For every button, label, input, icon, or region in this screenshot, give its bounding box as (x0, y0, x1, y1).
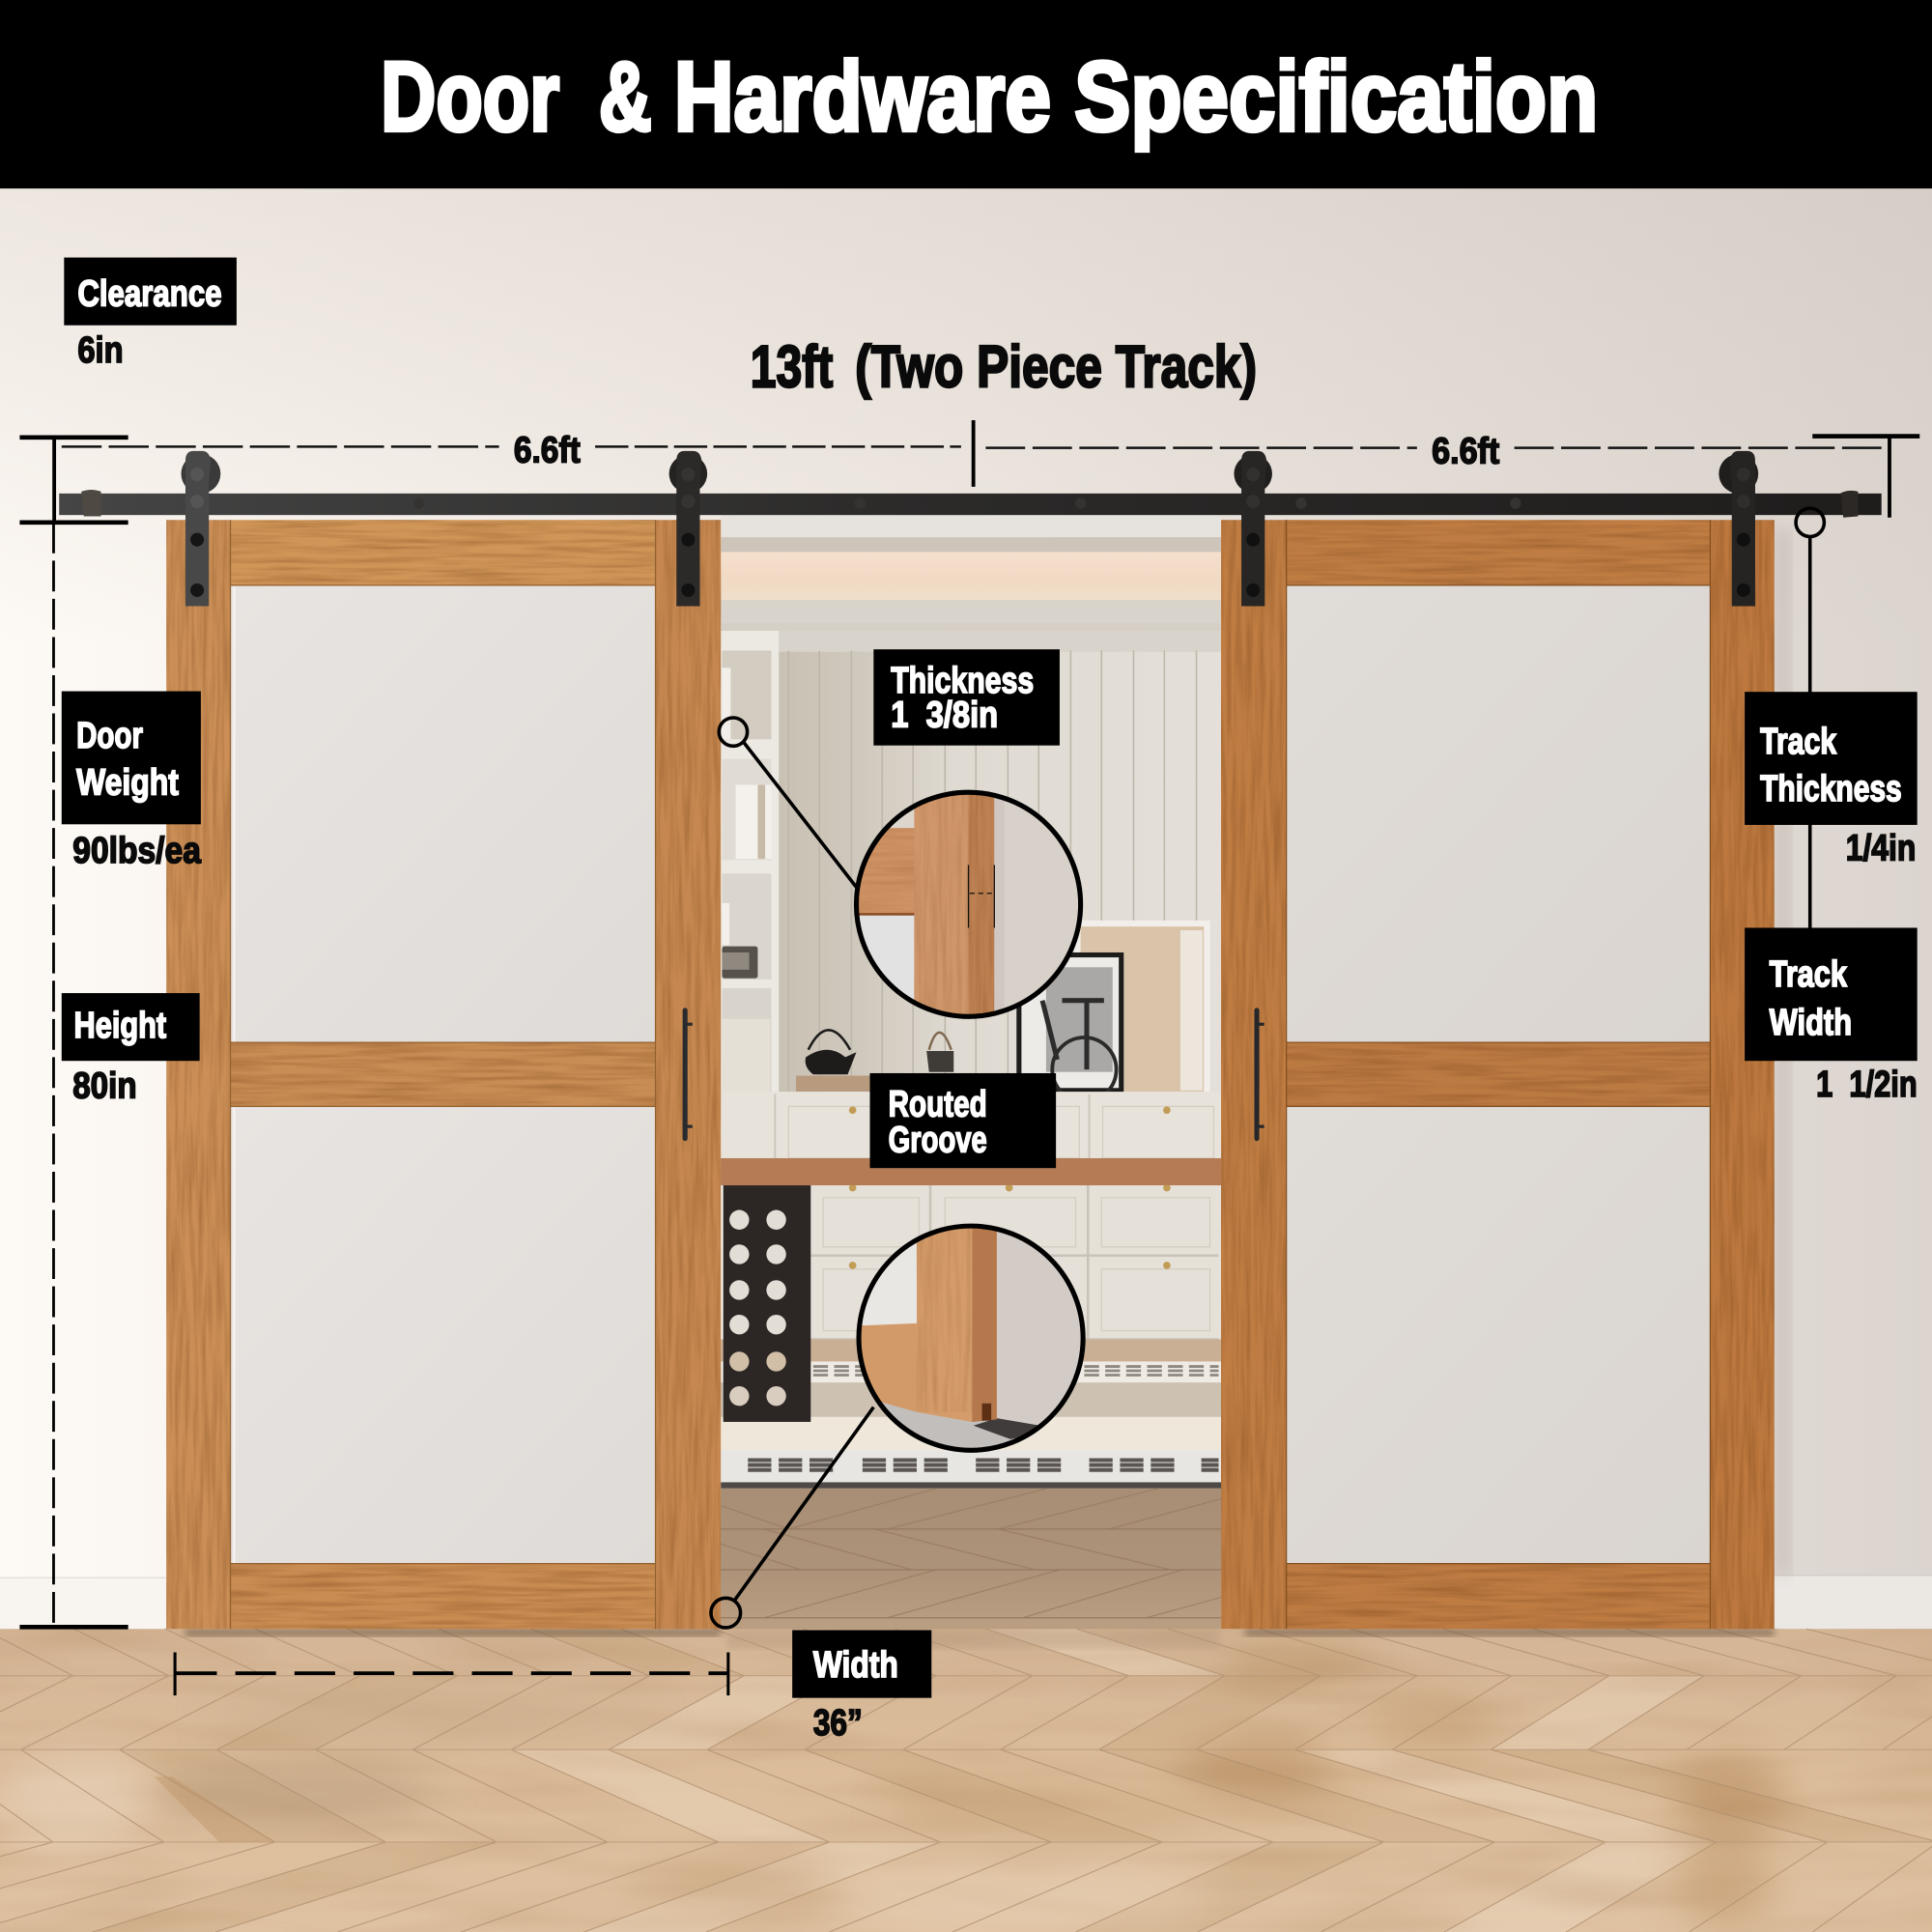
track length heading: 13ft (751, 334, 833, 400)
magnifier: door edge (850, 788, 1096, 1025)
leaning art: bicycle print (1016, 952, 1123, 1101)
counter top (721, 1158, 1221, 1185)
leaning art: canvas (1074, 921, 1210, 1093)
interior room seen through the opening (690, 515, 1233, 1630)
clearance label (64, 258, 237, 371)
floor plank lines (0, 1629, 1932, 1932)
routed groove label (870, 1073, 1056, 1168)
floor band and rug (721, 1339, 1221, 1489)
clearance label: 6in (77, 329, 124, 371)
small target ring and leader (719, 718, 856, 887)
height label: 80in (72, 1065, 137, 1106)
track mount bolts (413, 497, 1521, 509)
track length heading: (Two Piece Track) (855, 334, 1257, 400)
clearance label: Clearance (77, 272, 222, 314)
right track stop (1841, 491, 1858, 518)
right door (1221, 520, 1775, 1629)
herringbone floor (0, 1629, 1932, 1932)
height label: Height (74, 1005, 166, 1046)
track width label: Width (1770, 1002, 1852, 1043)
left door (166, 520, 721, 1629)
track dimension lines (62, 420, 1882, 487)
track length heading (751, 334, 1257, 400)
right door handle (1254, 1008, 1264, 1141)
door weight label: 90lbs/ea (72, 830, 202, 871)
track thickness label (1745, 692, 1918, 868)
left door stiles (166, 520, 721, 1629)
rug pattern bottom (748, 1460, 1218, 1470)
doorway floor shade (727, 1629, 1220, 1649)
title: Hardware (674, 42, 1051, 152)
door height dimension (19, 523, 128, 1627)
wall shadow beside right door (1775, 529, 1792, 1575)
title: Door (381, 42, 559, 152)
width label: 36” (813, 1702, 863, 1744)
ceiling (721, 515, 1221, 631)
kettles and tray (796, 1030, 953, 1092)
right door glass panels (1287, 582, 1712, 1566)
interior wood floor (690, 1489, 1233, 1631)
left track stop (81, 490, 101, 516)
title (381, 42, 1598, 152)
beadboard wall (779, 631, 1221, 1094)
floor plank tones (93, 1629, 1932, 1932)
width label (792, 1631, 931, 1744)
floor tone patches (0, 1629, 1932, 1932)
hanger 1 (182, 451, 220, 607)
track width label (1745, 927, 1918, 1105)
right door rails (1287, 520, 1710, 1629)
wall background (0, 188, 1932, 1630)
right door stiles (1221, 520, 1775, 1629)
track width label: Track (1770, 953, 1848, 995)
thickness label: 1 3/8in (891, 695, 998, 736)
routed groove label: Routed (889, 1084, 987, 1125)
door width dimension (175, 1652, 728, 1695)
door weight label: Weight (76, 762, 179, 804)
door weight label: Door (76, 715, 143, 756)
track thickness label: 1/4in (1846, 827, 1916, 868)
routed groove callout (711, 1073, 1096, 1628)
header bar (0, 0, 1932, 188)
clearance bracket right (1812, 437, 1919, 518)
left door handle (683, 1008, 693, 1141)
thickness callout (719, 649, 1096, 1025)
thickness label: Thickness (891, 660, 1034, 701)
width label: Width (813, 1644, 898, 1686)
hanger 3 (1234, 451, 1272, 607)
title: & (599, 42, 652, 152)
black perforated stand (724, 1185, 810, 1422)
hanger 2 (669, 451, 707, 607)
left door rails (231, 520, 656, 1629)
left door glass panels (231, 582, 657, 1566)
magnifier: door bottom (856, 1223, 1086, 1453)
rug pattern top (813, 1367, 1218, 1375)
sliding track rail (59, 490, 1882, 518)
cabinets (721, 1092, 1221, 1342)
height label (62, 993, 200, 1106)
thickness label (873, 649, 1060, 746)
door floor shadows (185, 1629, 1775, 1636)
clearance bracket left (19, 438, 128, 523)
track leader line and ring (1796, 508, 1824, 927)
hanger 4 (1719, 451, 1758, 607)
track dimension lines: 6.6ft (1432, 431, 1500, 472)
shelf unit (721, 631, 779, 1096)
door weight label (62, 692, 202, 871)
track dimension lines: 6.6ft (514, 429, 581, 470)
target ring and leader (711, 1407, 873, 1628)
title: Specification (1074, 42, 1598, 152)
track thickness label: Track (1760, 721, 1837, 762)
routed groove label: Groove (889, 1120, 987, 1161)
